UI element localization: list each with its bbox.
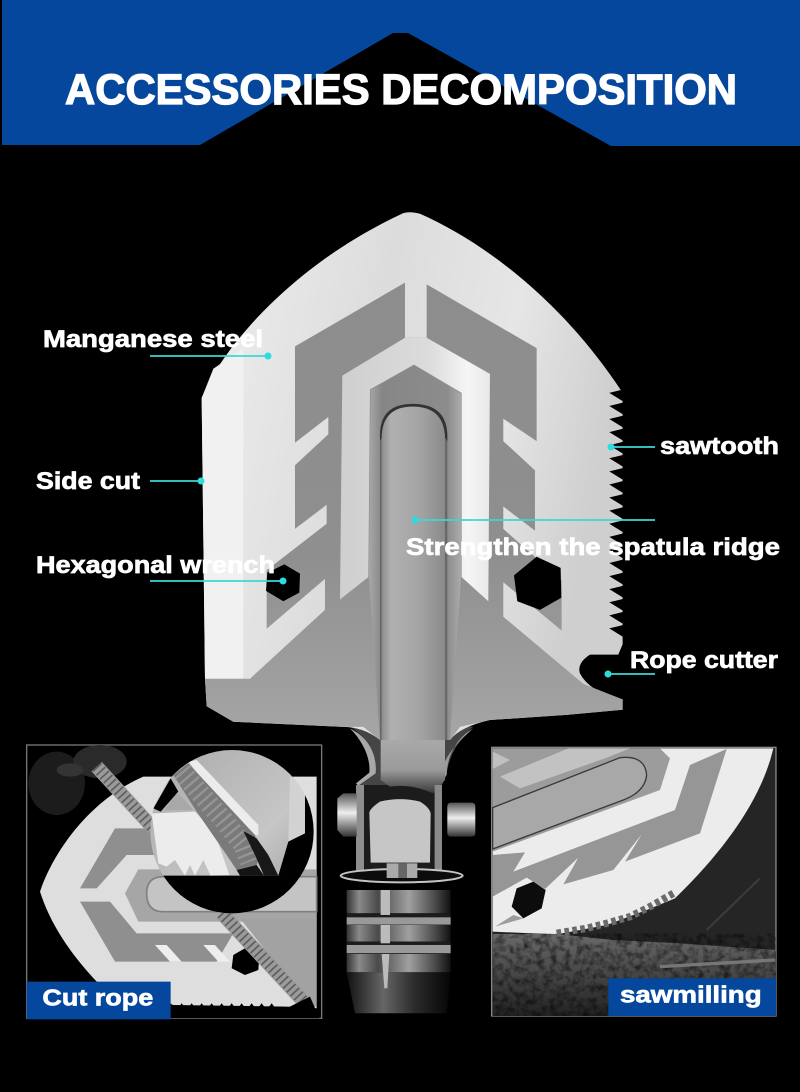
label: cut rope xyxy=(27,982,171,1019)
hex block xyxy=(369,799,431,863)
ridge xyxy=(493,757,647,849)
title: ACCESSORIES DECOMPOSITION xyxy=(65,66,737,114)
label: sawmilling xyxy=(608,978,776,1016)
right bolt xyxy=(447,803,475,837)
centre arch stripe xyxy=(340,338,490,601)
grey emblem xyxy=(205,283,623,740)
callout: strengthen the spatula ridge xyxy=(406,516,780,561)
label: cut rope: Cut rope xyxy=(42,984,153,1010)
callout: sawtooth xyxy=(608,433,779,460)
white blade teeth xyxy=(152,812,229,876)
lower teeth xyxy=(171,997,320,1019)
hand xyxy=(28,745,127,815)
callout: sawtooth: sawtooth xyxy=(660,433,779,460)
callout: rope cutter xyxy=(604,647,778,678)
inner panel xyxy=(369,365,461,740)
saw teeth xyxy=(609,389,623,637)
left bolt xyxy=(337,793,357,837)
hexagonal hole left xyxy=(266,564,300,601)
mounting plates xyxy=(356,785,442,873)
callout: side cut: Side cut xyxy=(36,468,140,495)
shovel head xyxy=(40,777,317,1008)
upper grey emblem xyxy=(493,748,670,852)
blade close-up xyxy=(493,748,773,934)
rope xyxy=(97,767,308,1007)
shovel blade xyxy=(202,212,623,740)
spatula ridge xyxy=(380,404,447,740)
rope close-up xyxy=(173,763,260,870)
grip rings xyxy=(347,890,451,1013)
header banner xyxy=(2,0,800,146)
ground xyxy=(493,934,776,1016)
saw dust on teeth xyxy=(557,893,673,933)
hexagon hole xyxy=(512,882,546,918)
collar disk xyxy=(341,863,463,882)
shovel neck and handle xyxy=(337,727,475,1013)
white bevel xyxy=(188,760,258,836)
callout: manganese steel xyxy=(43,326,272,360)
hexagon hole xyxy=(232,948,259,975)
callout: side cut xyxy=(36,468,204,495)
hexagonal hole right xyxy=(514,557,561,610)
magnifier circle xyxy=(147,750,317,915)
callout: rope cutter: Rope cutter xyxy=(630,647,778,674)
inset photo: cut rope xyxy=(27,745,322,1019)
label: sawmilling: sawmilling xyxy=(620,981,762,1007)
callout: manganese steel: Manganese steel xyxy=(43,326,263,353)
callout: hexagonal wrench: Hexagonal wrench xyxy=(36,552,275,579)
callout: strengthen the spatula ridge: Strengthen the spatula ridge xyxy=(406,534,780,561)
lower grey emblem xyxy=(493,749,727,897)
inset photo: sawmilling xyxy=(492,747,776,1016)
